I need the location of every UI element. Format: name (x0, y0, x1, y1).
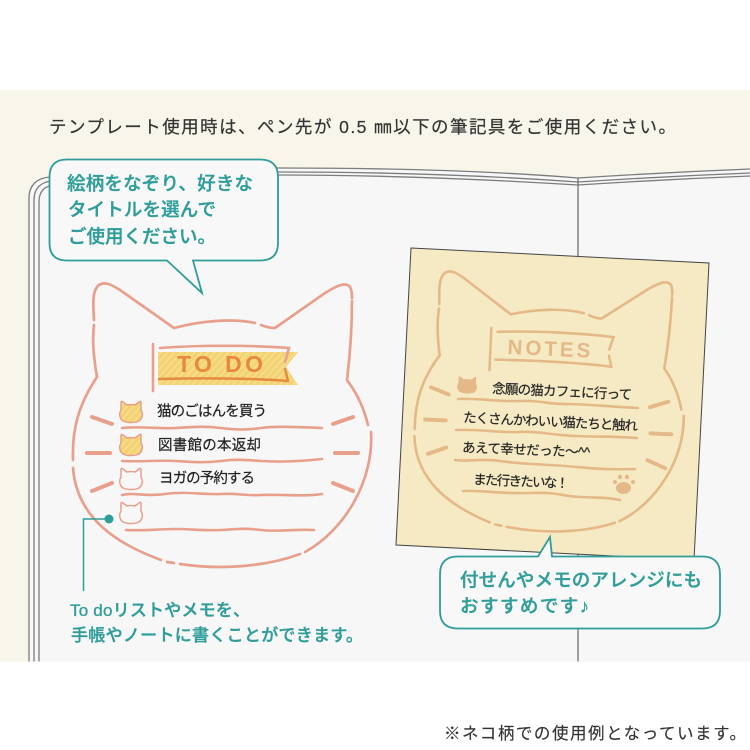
notebook (29, 168, 750, 662)
sticky note (396, 248, 709, 560)
notes whiskers (423, 387, 673, 468)
note text 4: また行きたいな！ (473, 472, 569, 491)
banner yellow (158, 352, 298, 385)
icon: cat empty 1 (120, 468, 142, 490)
callout: sticky note suggestion: おすすめです♪ (460, 596, 589, 616)
todo caption: 手帳やノートに書くことができます。 (71, 625, 363, 645)
notes ruled lines (455, 399, 638, 500)
icon: paw (613, 475, 635, 494)
callout: trace the pattern: タイトルを選んで (68, 199, 216, 220)
callout: trace the pattern: ご使用ください。 (68, 226, 216, 247)
todo text 3: ヨガの予約する (159, 470, 255, 487)
callout: sticky note suggestion (440, 537, 720, 628)
icon: cat empty 2 (120, 502, 142, 524)
notes title: NOTES (507, 336, 591, 363)
todo text 2: 図書館の本返却 (158, 437, 261, 454)
callout: trace the pattern: 絵柄をなぞり、好きな (67, 173, 253, 194)
banner bottom line (159, 369, 288, 381)
todo text 1: 猫のごはんを買う (157, 403, 267, 420)
banner title: TO DO (177, 351, 263, 377)
background band (0, 90, 750, 662)
notes banner (489, 328, 614, 376)
todo caption: To doリストやメモを、 (70, 601, 250, 620)
leader line (84, 514, 114, 591)
icon: cat filled 1 (120, 401, 142, 422)
cat outline (73, 283, 371, 567)
icon: filled cat (457, 376, 477, 394)
notes cat template (410, 270, 690, 537)
todo caption (70, 601, 363, 645)
note text 3: あえて幸せだった〜^^ (462, 440, 591, 460)
notes cat outline (410, 270, 690, 537)
whiskers (87, 417, 358, 491)
note text 2: たくさんかわいい猫たちと触れ (463, 410, 639, 434)
callout: trace the pattern (50, 160, 278, 293)
note text 1: 念願の猫カフェに行って (492, 381, 632, 402)
footnote: ※ネコ柄での使用例となっています。 (444, 724, 746, 743)
callout: sticky note suggestion: 付せんやメモのアレンジにも (460, 570, 702, 590)
header instruction: テンプレート使用時は、ペン先が 0.5 ㎜以下の筆記具をご使用ください。 (49, 117, 676, 137)
todo ruled lines (122, 427, 322, 531)
banner outline (153, 344, 289, 391)
icon: cat filled 2 (120, 434, 142, 456)
cat todo template (73, 283, 371, 567)
